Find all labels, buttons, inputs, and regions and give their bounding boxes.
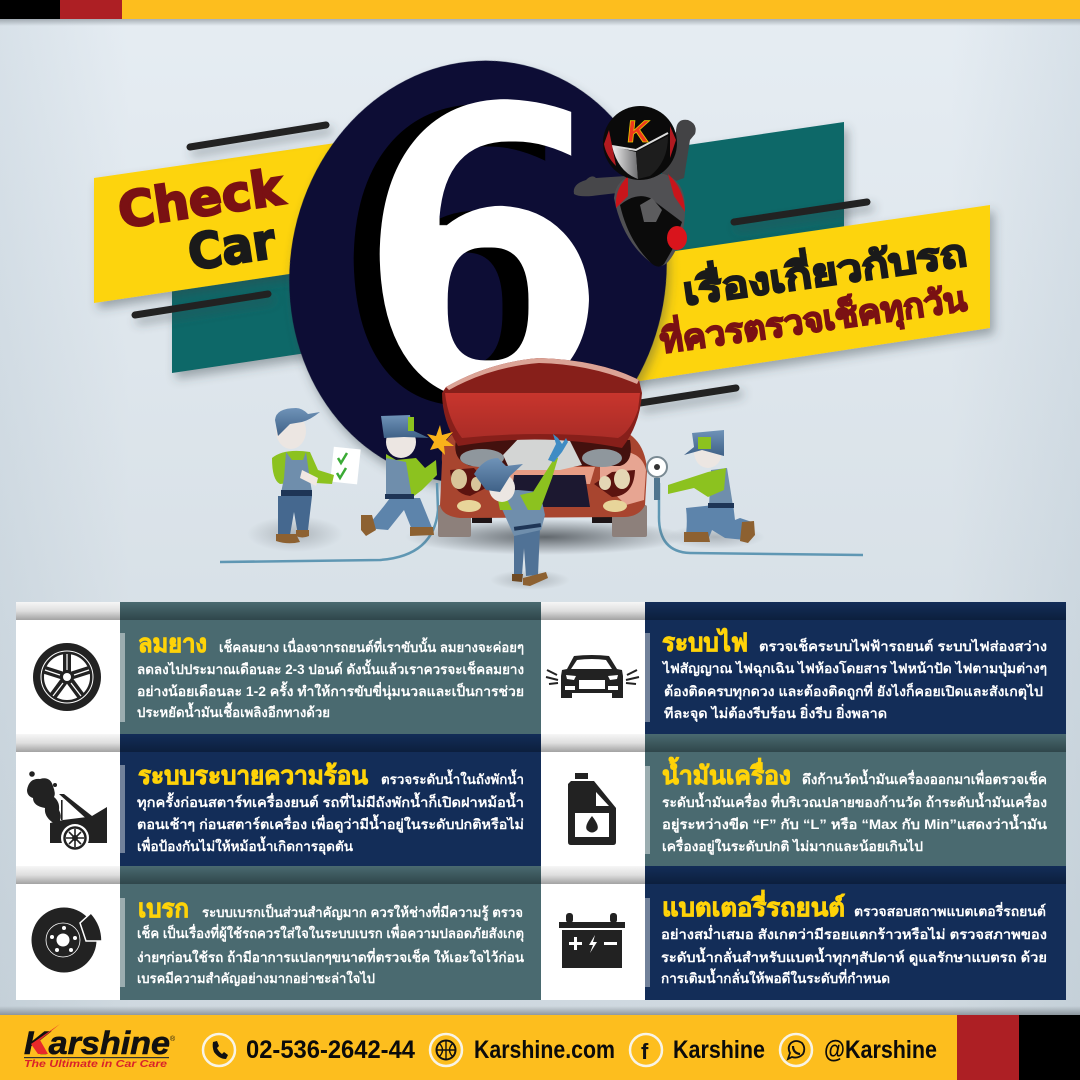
heading and body: ลดลงไปประมาณเดือนละ 2-3 ปอนด์ ดังนั้นแล้วเราควรจะเช็คลมยาง	[137, 659, 524, 677]
heading and body: เช็คลมยาง เนื่องจากรถยนต์ที่เราขับนั้น ลมยางจะค่อยๆ	[219, 637, 524, 655]
icon: car headlights	[546, 655, 639, 698]
title: Thai subtitle: ที่ควรตรวจเช็คทุกวัน	[657, 274, 969, 363]
mechanic with wrench	[474, 434, 568, 586]
heading and body: อยู่ระหว่างขีด “F” กับ “L” หรือ “Max กับ Min”แสดงว่าน้ำมัน	[662, 814, 1048, 833]
big number 6: 6	[327, 24, 587, 501]
contact: facebook: f	[641, 1039, 649, 1064]
icon: oil can	[568, 773, 616, 845]
footer	[0, 1006, 1080, 1080]
teal block right	[640, 122, 844, 258]
logo: ®	[170, 1035, 176, 1043]
heading and body: ระดับน้ำมันเครื่อง ที่บริเวณปลายของก้านวัด ถ้าระดับน้ำมันเครื่อง	[662, 792, 1047, 810]
heading and body	[137, 895, 525, 987]
heading and body: เบรคมีความสำคัญอย่างมากอย่าชะล่าใจไป	[137, 970, 375, 987]
card: cooling system	[16, 734, 541, 866]
icon: overheating engine	[27, 771, 107, 852]
title: Thai subtitle: เรื่องเกี่ยวกับรถ	[679, 226, 969, 314]
mechanic with gauge	[647, 430, 755, 543]
title: Check Car: Car	[184, 213, 280, 282]
heading and body: ไฟสัญญาณ ไฟฉุกเฉิน ไฟห้องโดยสาร ไฟหน้าปัด ไฟตามปุ่มต่างๆ	[661, 659, 1047, 677]
title: Thai subtitle	[657, 226, 969, 363]
contact: phone: 02-536-2642-44	[246, 1036, 415, 1064]
heading and body: ตอนเช้าๆ ก่อนสตาร์ตเครื่อง เพื่อดูว่ามีน้ำอยู่ในระดับปกติหรือไม่	[137, 814, 524, 833]
logo: The Ultimate in Car Care	[24, 1059, 168, 1070]
contact: whatsapp: @Karshine	[824, 1036, 937, 1064]
heading and body: ลมยาง	[138, 630, 207, 658]
big number 6: 6	[353, 19, 613, 496]
tyre gauge	[647, 457, 667, 477]
mascot helmet letter: K	[625, 114, 652, 149]
heading and body: เครื่องอยู่ในระดับปกติ ไม่มากและน้อยเกินไป	[662, 836, 923, 855]
heading and body: แบตเตอรี่รถยนต์	[662, 890, 845, 922]
heading and body	[137, 762, 524, 855]
card: electrical lights	[541, 602, 1066, 734]
card grid	[16, 602, 1066, 1000]
contact: website	[430, 1034, 615, 1066]
card: engine oil	[541, 734, 1066, 866]
contact: facebook: Karshine	[673, 1036, 765, 1064]
big number disc	[256, 31, 700, 513]
yellow banner right	[600, 205, 990, 387]
yellow banner left	[94, 138, 370, 303]
heading and body: เพื่อป้องกันไม่ให้หม้อน้ำเกิดการอุดตัน	[137, 836, 354, 855]
heading and body: ระดับน้ำกลั่นสำหรับแบตน้ำทุกๆสัปดาห์ ดูแลรักษาแบตรถ ด้วย	[661, 947, 1047, 966]
car	[438, 358, 647, 537]
heading and body: ทุกครั้งก่อนสตาร์ทเครื่องยนต์ รถที่ไม่มีถังพักน้ำก็เปิดฝาหม้อน้ำ	[137, 792, 524, 811]
contact: whatsapp	[780, 1034, 937, 1066]
top colour bar	[0, 0, 1080, 26]
heading and body: ตรวจเช็คระบบไฟฟ้ารถยนต์ ระบบไฟส่องสว่าง	[759, 637, 1047, 654]
heading and body: ตรวจสอบสถาพแบตเตอรี่รถยนต์	[854, 901, 1046, 919]
mascot: racer	[574, 106, 696, 267]
card: battery	[541, 866, 1066, 1000]
heading and body: ตรวจระดับน้ำในถังพักน้ำ	[381, 769, 524, 787]
icon: wheel	[33, 643, 101, 711]
open hood	[442, 358, 642, 448]
engine bay	[455, 440, 631, 466]
heading and body: การเติมน้ำกลั่นให้พอดีในระดับที่กำหนด	[661, 968, 890, 986]
heading and body: ประหยัดน้ำมันเชื้อเพลิงอีกทางด้วย	[137, 702, 330, 720]
hoses	[220, 483, 863, 562]
heading and body	[661, 890, 1047, 986]
heading and body: ทีละจุด ไม่ต้องรีบร้อน ยิ่งรีบ ยิ่งพลาด	[664, 703, 887, 722]
card: brakes	[16, 866, 541, 1000]
teal block left	[172, 266, 340, 373]
mechanic with clipboard	[272, 408, 361, 543]
heading and body: น้ำมันเครื่อง	[662, 756, 791, 790]
title: Check Car	[114, 159, 288, 282]
mechanic with spark	[361, 415, 454, 536]
heading and body: อย่างสม่ำเสมอ สังเกตว่ามีรอยแตกร้าวหรือไม่ ตรวจสภาพของ	[661, 924, 1047, 942]
contact: phone	[203, 1034, 415, 1066]
heading and body: ดึงก้านวัดน้ำมันเครื่องออกมาเพื่อตรวจเช็ค	[802, 769, 1047, 787]
heading and body: ระบบไฟ	[662, 627, 748, 657]
contact: facebook	[630, 1034, 765, 1066]
heading and body	[137, 630, 524, 720]
header graphic	[94, 19, 990, 513]
spark	[427, 425, 454, 455]
icon: brake disc	[32, 908, 102, 972]
heading and body: ต้องติดครบทุกดวง และต้องติดถูกที่ ยังไงก็คอยเปิดและสังเกตุไป	[664, 681, 1043, 700]
heading and body	[661, 627, 1047, 722]
heading and body: เบรก	[138, 895, 189, 923]
heading and body: ระบบเบรกเป็นส่วนสำคัญมาก ควรให้ช่างที่มีความรู้ ตรวจ	[202, 902, 523, 921]
title: Check Car: Check	[114, 159, 288, 240]
logo: Karshine	[24, 1025, 170, 1061]
contact: website: Karshine.com	[474, 1036, 615, 1064]
heading and body: ง่ายๆก่อนใช้รถ ถ้ามีอาการแปลกๆขนาดที่ตรวจเช็ค ให้เอะใจไว้ก่อน	[137, 947, 525, 965]
heading and body: เช็ค เป็นเรื่องที่ผู้ใช้รถควรใส่ใจในระบบเบรก เพื่อความปลอดภัยสังเกตุ	[137, 923, 524, 942]
icon: battery	[559, 913, 625, 968]
heading and body	[662, 756, 1048, 855]
scene: car and mechanics	[220, 358, 863, 590]
ground shadows	[247, 516, 765, 590]
heading and body: อย่างน้อยเดือนละ 1-2 ครั้ง ทำให้การขับขี่นุ่มนวลและเป็นการช่วย	[137, 681, 524, 700]
accent stripes	[135, 125, 867, 403]
heading and body: ระบบระบายความร้อน	[138, 762, 368, 790]
card: tyre pressure	[16, 602, 541, 734]
